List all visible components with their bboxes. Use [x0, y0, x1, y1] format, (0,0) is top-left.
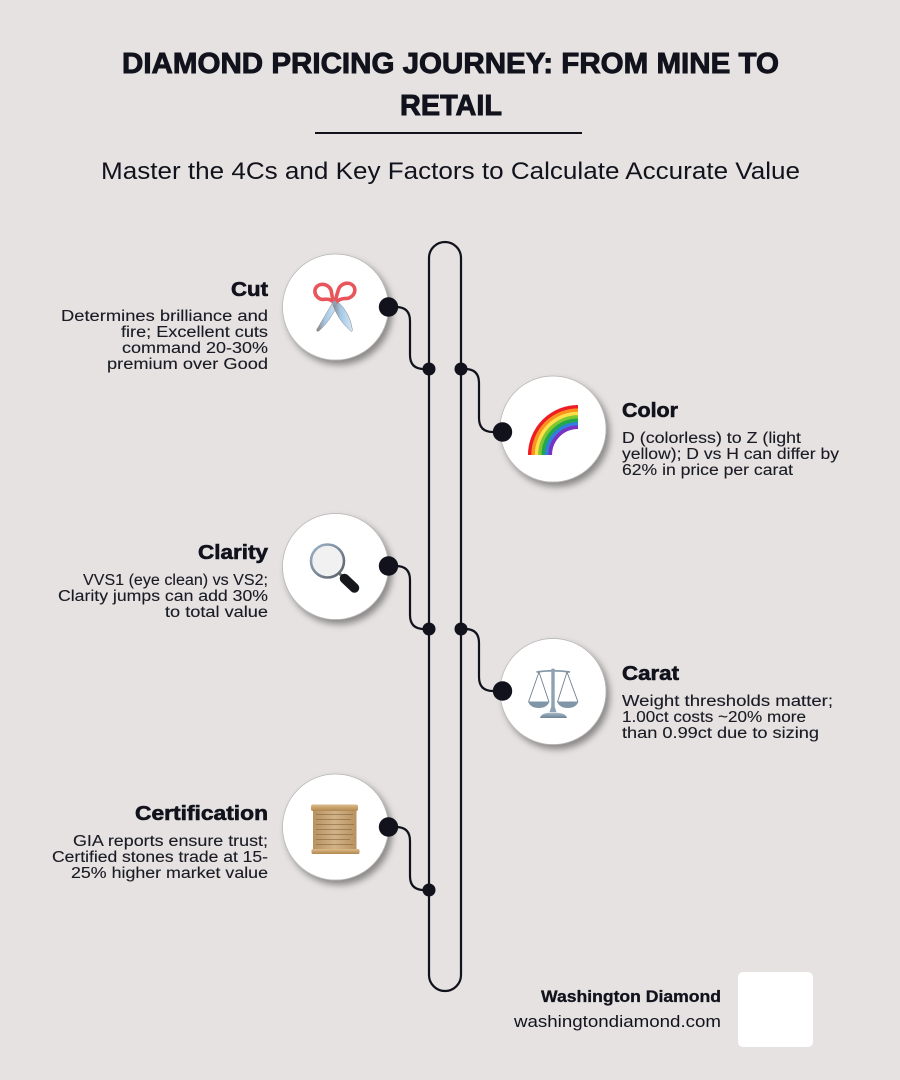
certification heading: Certification	[135, 803, 268, 825]
carat description: than 0.99ct due to sizing	[622, 725, 819, 742]
color connector	[461, 369, 503, 432]
brand url: washingtondiamond.com	[513, 1013, 721, 1031]
title underline	[315, 132, 582, 134]
clarity outer dot	[379, 556, 398, 576]
certification description	[52, 833, 268, 882]
color description: yellow); D vs H can differ by	[622, 446, 839, 463]
clarity track dot	[422, 622, 436, 636]
cut connector	[389, 307, 429, 369]
icon: scissors	[315, 283, 355, 331]
icon: magnifying glass	[311, 544, 354, 588]
certification connector	[389, 827, 429, 890]
cut description: premium over Good	[107, 356, 268, 373]
icon: scroll	[311, 804, 360, 854]
clarity connector	[389, 566, 429, 629]
footer brand	[513, 988, 721, 1031]
color outer dot	[493, 422, 512, 442]
title	[122, 48, 779, 122]
clarity description: to total value	[165, 604, 268, 621]
title: RETAIL	[400, 90, 502, 122]
panel: cut	[61, 254, 436, 376]
color heading: Color	[622, 400, 678, 422]
clarity icon circle	[282, 514, 388, 620]
panel: color	[454, 362, 839, 482]
carat outer dot	[493, 681, 512, 701]
subtitle: Master the 4Cs and Key Factors to Calculate Accurate Value	[101, 158, 800, 185]
cut outer dot	[379, 297, 398, 317]
clarity description: VVS1 (eye clean) vs VS2;	[83, 572, 268, 589]
clarity heading: Clarity	[198, 542, 269, 564]
cut description: command 20-30%	[122, 340, 268, 357]
carat description	[622, 693, 833, 742]
cut heading: Cut	[231, 279, 268, 301]
certification icon circle	[282, 774, 388, 880]
panel: carat	[454, 622, 833, 744]
certification track dot	[422, 884, 436, 896]
color track dot	[454, 362, 468, 376]
certification description: 25% higher market value	[71, 865, 268, 882]
carat description: 1.00ct costs ~20% more	[622, 709, 806, 726]
certification outer dot	[379, 817, 398, 837]
color description	[622, 430, 839, 479]
carat icon circle	[500, 638, 606, 744]
brand name: Washington Diamond	[541, 988, 721, 1006]
title: DIAMOND PRICING JOURNEY: FROM MINE TO	[122, 48, 779, 80]
color icon circle	[500, 376, 606, 482]
cut track dot	[422, 362, 436, 376]
cut description: fire; Excellent cuts	[121, 324, 268, 341]
carat description: Weight thresholds matter;	[622, 693, 833, 710]
cut description	[61, 308, 268, 373]
icon: rainbow	[530, 407, 578, 455]
carat heading: Carat	[622, 663, 679, 685]
certification description: Certified stones trade at 15-	[52, 849, 268, 866]
clarity description	[58, 572, 268, 621]
cut description: Determines brilliance and	[61, 308, 268, 325]
clarity description: Clarity jumps can add 30%	[58, 588, 268, 605]
panel: clarity	[58, 514, 436, 636]
carat track dot	[454, 622, 468, 636]
carat connector	[461, 629, 503, 691]
panel: certification	[52, 774, 436, 896]
color description: D (colorless) to Z (light	[622, 430, 802, 447]
logo placeholder	[738, 972, 813, 1047]
color description: 62% in price per carat	[622, 462, 794, 479]
icon: balance scale	[528, 668, 578, 718]
cut icon circle	[282, 254, 388, 360]
certification description: GIA reports ensure trust;	[73, 833, 268, 850]
central timeline track	[429, 242, 461, 991]
